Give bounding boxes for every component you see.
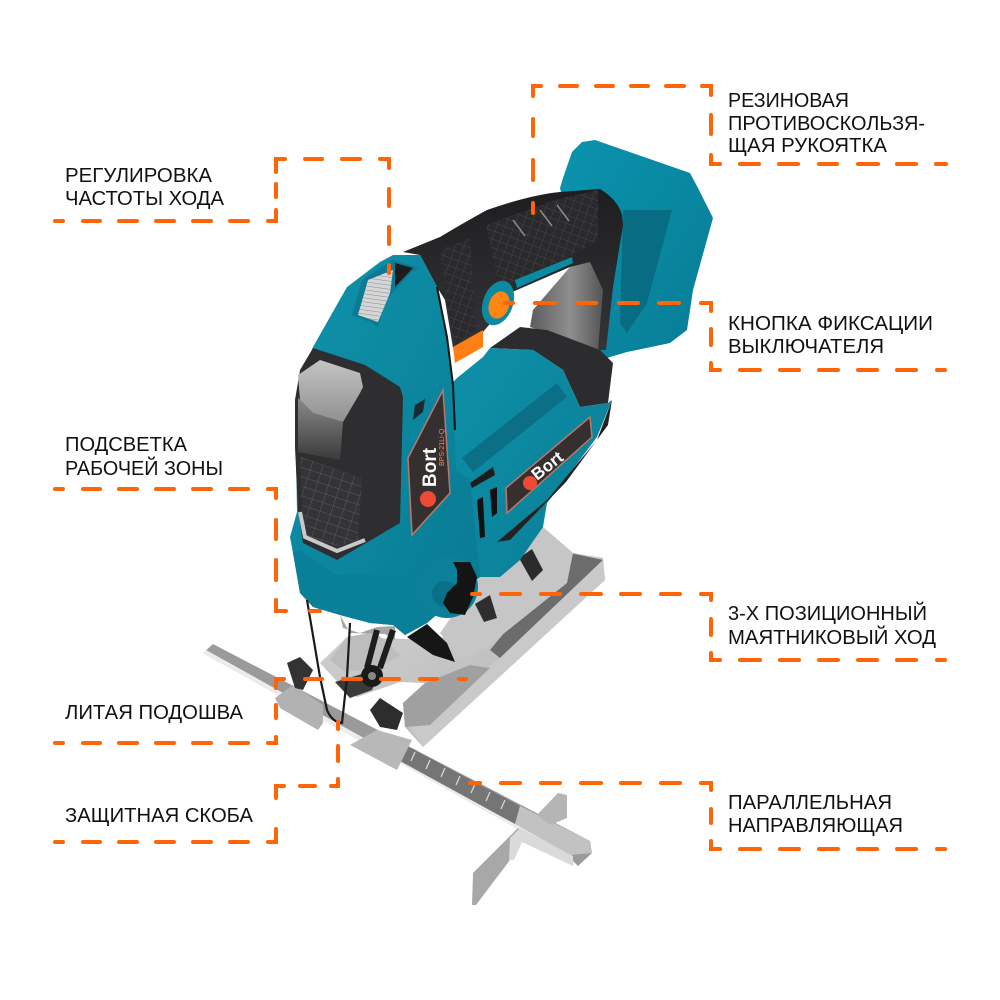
label: work light: ПОДСВЕТКА [65, 433, 187, 456]
ruler fence [472, 793, 573, 905]
battery mount [560, 140, 713, 360]
right clamp [350, 698, 412, 770]
leader: lock button [505, 303, 945, 370]
leader: parallel guide [470, 783, 945, 849]
label: parallel guide: НАПРАВЛЯЮЩАЯ [728, 814, 903, 837]
rear body teal housing [405, 348, 612, 635]
label: lock button: КНОПКА ФИКСАЦИИ [728, 312, 933, 335]
LED strip [300, 512, 365, 551]
label: cast base: ЛИТАЯ ПОДОШВА [65, 701, 243, 724]
label: pendulum: МАЯТНИКОВЫЙ ХОД [728, 625, 936, 649]
leader: speed control [55, 159, 389, 273]
label: pendulum: 3-Х ПОЗИЦИОННЫЙ [728, 601, 927, 625]
leader: rubber grip [533, 86, 946, 213]
ventilation mesh [300, 457, 362, 547]
leader: pendulum [472, 594, 945, 660]
orange trigger [453, 330, 483, 363]
cast base plate [320, 527, 605, 747]
rear body black housing [490, 327, 613, 407]
label: speed control [65, 164, 224, 210]
label: speed control: ЧАСТОТЫ ХОДА [65, 187, 224, 210]
label: lock button [728, 312, 933, 358]
label: parallel guide [728, 791, 903, 837]
leader: guard [55, 722, 338, 842]
label: guard: ЗАЩИТНАЯ СКОБА [65, 804, 253, 827]
protective wire guard [307, 600, 350, 723]
Bort badge on head: BPS-21Li-Q [439, 428, 446, 466]
parallel guide ruler [203, 644, 592, 866]
speed wheel [352, 260, 420, 327]
label: pendulum [728, 601, 936, 649]
label: work light [65, 433, 223, 480]
Bort badge on head: Bort [420, 447, 441, 487]
jigsaw head housing [290, 255, 480, 635]
pendulum lever [416, 556, 478, 618]
label: parallel guide: ПАРАЛЛЕЛЬНАЯ [728, 791, 892, 814]
leader: cast base [55, 679, 466, 743]
label: work light: РАБОЧЕЙ ЗОНЫ [65, 456, 223, 480]
vent slot [413, 399, 425, 420]
motor casting [407, 527, 573, 662]
leader: work light [55, 489, 320, 611]
label: rubber grip: ЩАЯ РУКОЯТКА [728, 134, 887, 157]
saw blade holder [340, 615, 395, 687]
lock button [476, 276, 520, 330]
Bort badge on head [408, 390, 450, 535]
front black face panel [295, 348, 403, 560]
label: rubber grip [728, 89, 925, 157]
left clamp [275, 657, 323, 730]
jigsaw illustration [203, 140, 713, 905]
label: rubber grip: РЕЗИНОВАЯ [728, 89, 849, 112]
Bort badge on body [506, 417, 592, 513]
Bort badge on body: Bort [528, 447, 567, 484]
label: rubber grip: ПРОТИВОСКОЛЬЗЯ- [728, 112, 925, 135]
handle post [530, 260, 603, 350]
label: lock button: ВЫКЛЮЧАТЕЛЯ [728, 335, 884, 358]
label: speed control: РЕГУЛИРОВКА [65, 164, 212, 187]
black rubber handle [403, 189, 623, 350]
